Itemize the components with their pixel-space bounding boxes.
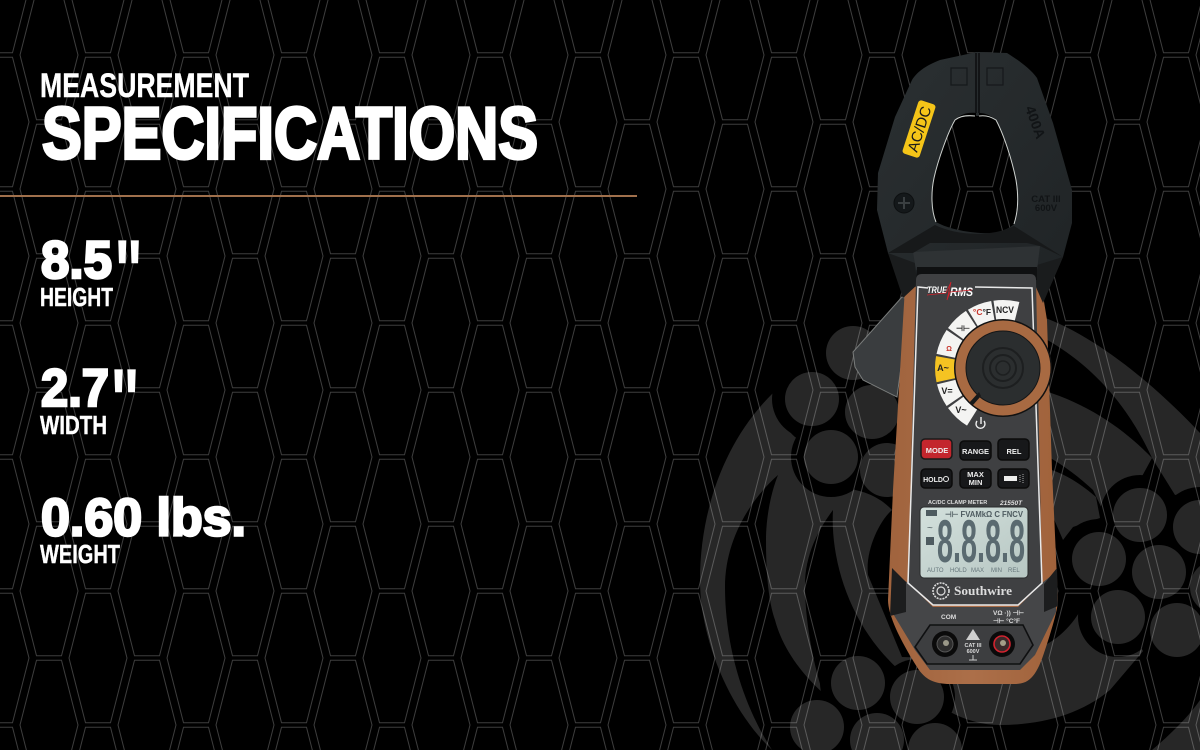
spec: weight: WEIGHT	[40, 539, 120, 569]
buttons	[921, 439, 1029, 488]
spec: width	[40, 353, 138, 448]
buttons: HOLD	[923, 477, 943, 484]
rotary dial legend sectors	[945, 310, 1017, 417]
dial labels: °C°F	[973, 307, 991, 317]
control panel	[908, 274, 1042, 605]
dial labels: ⊣⊢	[956, 323, 970, 333]
buttons: MIN	[969, 478, 982, 487]
lower grey section	[892, 572, 1056, 670]
clamp meter product illustration	[853, 52, 1072, 684]
clamp meter product illustration: 8.8.8.8	[937, 508, 1025, 575]
spec: height	[40, 224, 141, 319]
dial labels	[937, 305, 1015, 415]
title	[40, 67, 538, 174]
dial labels: V~	[955, 405, 967, 415]
buttons: MAX	[967, 470, 984, 479]
dial labels: Ω	[946, 346, 952, 353]
spec: height: 8.5	[41, 231, 112, 290]
title line: specifications: SPECIFICATIONS	[42, 94, 538, 174]
logo: TRUE RMS: RMS	[950, 285, 973, 299]
dial labels: NCV	[996, 305, 1015, 316]
background swirl logo watermark	[700, 316, 1200, 750]
LCD display: HOLD	[950, 568, 967, 574]
orange housing	[888, 283, 1058, 684]
terminal housing: CAT III	[964, 643, 982, 649]
dial labels: A~	[937, 363, 949, 373]
terminal labels	[941, 609, 1024, 625]
Southwire brand: Southwire	[954, 584, 1012, 598]
terminal housing: 600V	[967, 649, 980, 655]
spec: width: WIDTH	[40, 410, 107, 440]
sticker: AC/DC: AC/DC	[905, 104, 935, 154]
power symbol	[976, 417, 985, 428]
spec: width: ''	[112, 353, 138, 448]
clamp jaw	[877, 52, 1072, 303]
jaw marking: CAT III 600V: CAT III	[1031, 194, 1061, 205]
buttons: RANGE	[962, 447, 989, 456]
spec: width: 2.7	[41, 359, 109, 418]
spec: height: ''	[116, 224, 141, 319]
Southwire brand	[933, 583, 1012, 599]
rotary knob	[954, 319, 1052, 417]
buttons: MODE	[926, 446, 948, 455]
logo: TRUE RMS: TRUE	[927, 285, 948, 295]
dial labels: V=	[941, 386, 953, 396]
divider rule	[0, 195, 637, 197]
jaw marking: 400A: 400A	[1022, 104, 1049, 141]
terminal housing	[915, 625, 1033, 664]
title line: measurement: MEASUREMENT	[40, 67, 249, 105]
LCD display: ⊣⊢ FVAMkΩ C FNCV	[945, 509, 1024, 519]
LCD display: MIN	[991, 568, 1002, 574]
lower collar	[888, 225, 1063, 303]
LCD display: ~	[927, 523, 933, 534]
LCD display: AUTO	[927, 568, 944, 574]
model labels: AC/DC CLAMP METER	[928, 500, 987, 506]
jaw marking: CAT III 600V: 600V	[1035, 203, 1058, 214]
terminal labels: COM	[941, 614, 956, 621]
logo: TRUE RMS	[927, 282, 973, 300]
jaw marking: CAT III 600V	[1031, 194, 1061, 214]
terminal labels: ⊣⊢ °C°F	[993, 617, 1020, 625]
LCD display: REL	[1008, 568, 1020, 574]
model labels	[928, 500, 1023, 507]
terminal labels: VΩ ·)) ⊣⊢	[993, 609, 1024, 617]
LCD display: MAX	[971, 568, 984, 574]
spec: weight: 0.60 lbs.	[41, 488, 246, 548]
spec: height: HEIGHT	[40, 282, 113, 312]
buttons: REL	[1006, 447, 1022, 456]
LCD display	[920, 507, 1028, 578]
side trigger	[853, 297, 910, 397]
model labels: 21550T	[999, 500, 1023, 507]
